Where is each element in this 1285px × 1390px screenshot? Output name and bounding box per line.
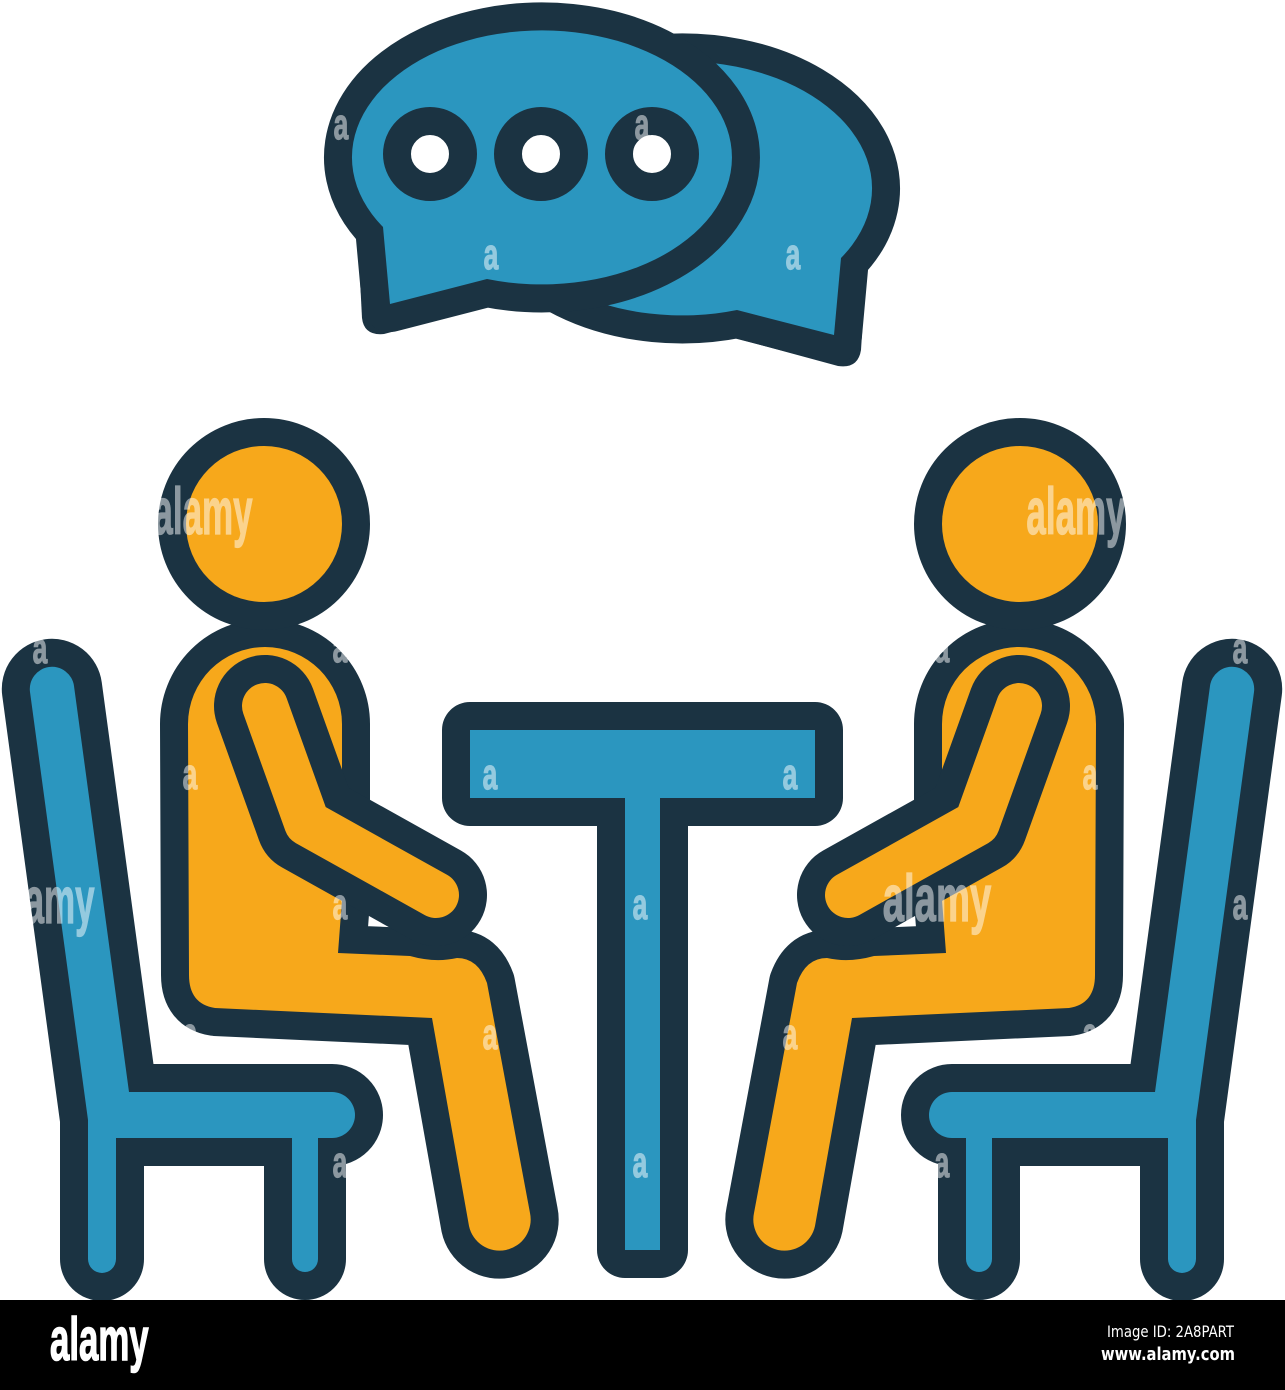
watermark overlay: a xyxy=(633,879,648,929)
watermark overlay: a xyxy=(183,749,198,799)
front speech bubble xyxy=(352,30,732,334)
three dots xyxy=(397,121,685,187)
watermark overlay: alamy xyxy=(1026,475,1126,549)
watermark overlay: a xyxy=(333,1137,348,1187)
watermark overlay: a xyxy=(633,1137,648,1187)
watermark overlay: a xyxy=(1233,879,1248,929)
watermark overlay: a xyxy=(786,229,801,279)
left person arm xyxy=(265,706,436,895)
watermark overlay: a xyxy=(1083,1008,1098,1058)
right chair xyxy=(929,667,1254,1273)
image id: Image ID: 2A8PART xyxy=(1107,1322,1234,1341)
watermark overlay: a xyxy=(935,1137,950,1187)
left person head xyxy=(186,446,342,602)
left seated figure and chair xyxy=(30,446,531,1273)
back speech bubble xyxy=(492,61,872,366)
left chair xyxy=(30,667,355,1273)
footer logo: alamy xyxy=(50,1307,149,1373)
watermark overlay: a xyxy=(183,1008,198,1058)
watermark overlay: a xyxy=(33,1137,48,1187)
icon: speech bubbles xyxy=(352,30,872,366)
footer bar xyxy=(0,1300,1285,1390)
watermark overlay: a xyxy=(935,622,950,672)
watermark overlay: a xyxy=(333,622,348,672)
right person arm xyxy=(848,706,1019,895)
left person torso and leg xyxy=(188,647,531,1251)
watermark overlay: a xyxy=(33,623,48,673)
watermark overlay: a xyxy=(783,749,798,799)
watermark overlay: alamy xyxy=(883,862,991,936)
right person head xyxy=(942,446,1098,602)
right person torso and leg xyxy=(753,647,1096,1251)
right seated figure and chair xyxy=(753,446,1254,1273)
watermark overlay: alamy xyxy=(153,475,253,549)
watermark overlay: a xyxy=(783,1009,798,1059)
watermark overlay: a xyxy=(483,749,498,799)
watermark overlay: a xyxy=(334,99,349,149)
watermark overlay: a xyxy=(333,879,348,929)
watermark overlay: a xyxy=(635,99,650,149)
watermark overlay: a xyxy=(1233,623,1248,673)
watermark overlay: a xyxy=(483,1009,498,1059)
watermark overlay xyxy=(0,99,1248,1187)
icon: table xyxy=(470,730,815,1250)
watermark overlay: a xyxy=(1233,1137,1248,1187)
watermark overlay: a xyxy=(484,229,499,279)
website: www.alamy.com xyxy=(1101,1344,1235,1365)
watermark overlay: a xyxy=(1083,749,1098,799)
